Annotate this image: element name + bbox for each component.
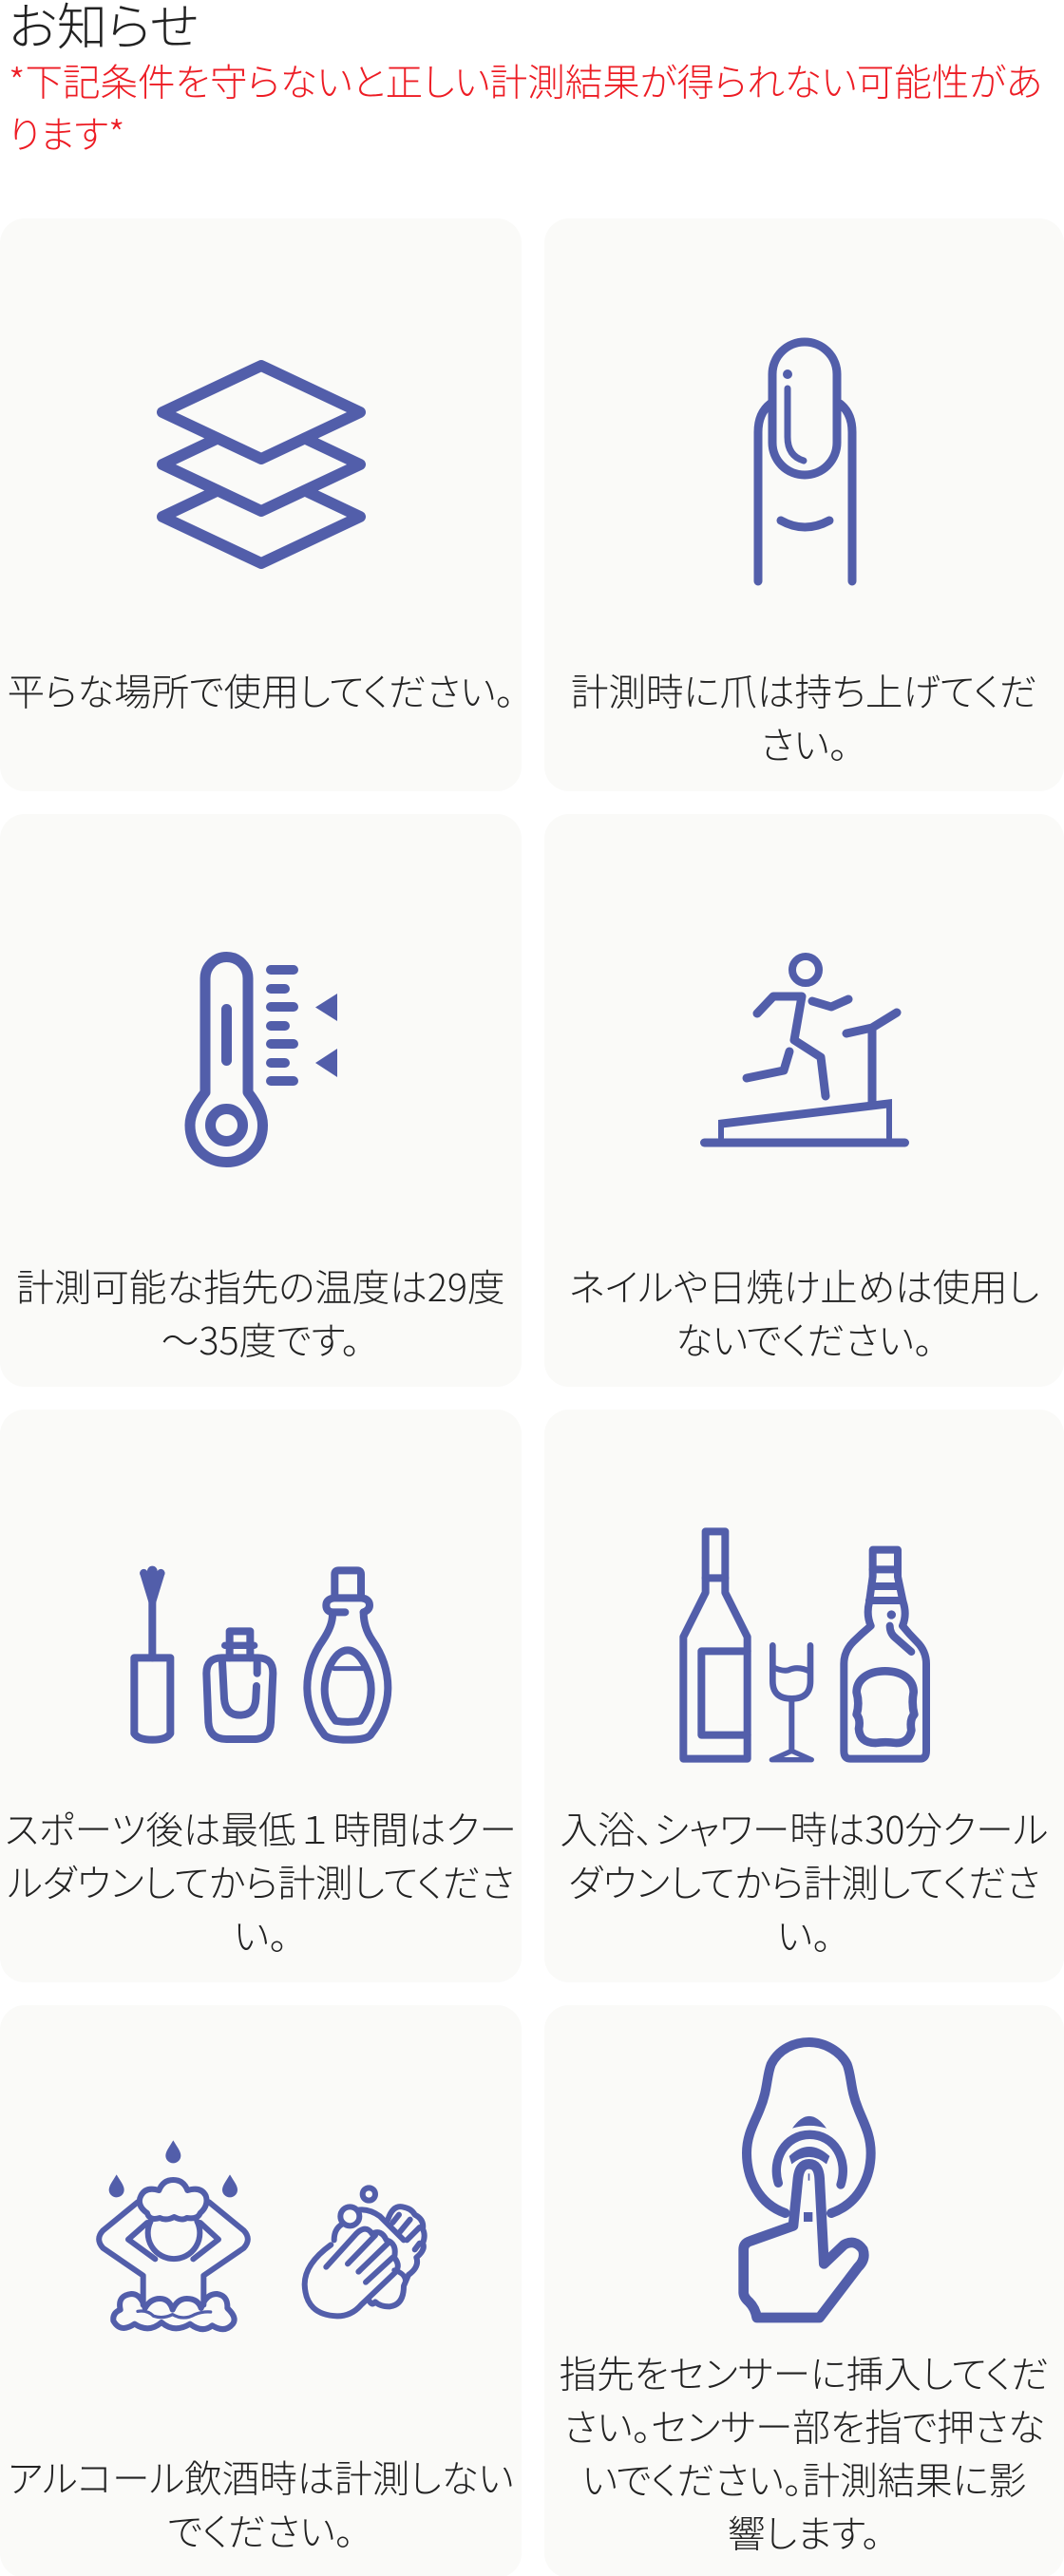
- text: temperature: ～35度です。: [162, 1312, 360, 1366]
- panel: sensor: [544, 2005, 1064, 2576]
- text: nail: 計測時に爪は持ち上げてくだ: [571, 663, 1037, 717]
- text: bath cooldown: ダウンしてから計測してくださ: [568, 1854, 1040, 1908]
- icon: finger on sensor: [738, 2037, 876, 2323]
- text: alcohol: でください。: [168, 2503, 353, 2557]
- panel: flat surface: [0, 218, 522, 791]
- text: exercise cooldown: スポーツ後は最低１時間はクー: [5, 1801, 517, 1855]
- text: treadmill: ないでください。: [675, 1312, 933, 1366]
- text: temperature: 計測可能な指先の温度は29度: [16, 1259, 505, 1313]
- warning text: *下記条件を守らないと正しい計測結果が得られない可能性があ: [9, 53, 1042, 107]
- text: exercise cooldown: [5, 1801, 517, 1961]
- icon: runner on treadmill: [700, 953, 909, 1147]
- icon: showering person and washing hands: [96, 2141, 428, 2333]
- text: sensor: [560, 2345, 1049, 2559]
- panel: temperature: [0, 814, 522, 1387]
- text: sensor: いでください。計測結果に影: [582, 2452, 1026, 2506]
- text: bath cooldown: [560, 1801, 1048, 1961]
- text: bath cooldown: 入浴、シャワー時は30分クール: [560, 1801, 1048, 1855]
- text: nail: [571, 663, 1037, 770]
- text: temperature: [16, 1259, 505, 1366]
- text: treadmill: [569, 1259, 1039, 1366]
- panel: treadmill: [544, 814, 1064, 1387]
- icon: stacked layers: [157, 360, 366, 569]
- panel: bath cooldown: [544, 1410, 1064, 1982]
- icon: fingernail: [754, 338, 857, 585]
- warning text: [9, 53, 1042, 160]
- icon: thermometer: [184, 952, 337, 1167]
- text: exercise cooldown: い。: [234, 1907, 288, 1961]
- panel: exercise cooldown: [0, 1410, 522, 1982]
- text: alcohol: アルコール飲酒時は計測しない: [8, 2450, 514, 2504]
- text: sensor: 指先をセンサーに挿入してくだ: [560, 2345, 1049, 2399]
- icon: bottles and glass: [679, 1527, 930, 1763]
- text: alcohol: [8, 2450, 514, 2557]
- text: exercise cooldown: ルダウンしてから計測してくださ: [8, 1854, 514, 1908]
- panel: alcohol: [0, 2005, 522, 2576]
- text: nail: さい。: [760, 716, 848, 770]
- warning text: ります*: [9, 105, 125, 160]
- text: treadmill: ネイルや日焼け止めは使用し: [569, 1259, 1039, 1313]
- panel: nail: [544, 218, 1064, 791]
- text: sensor: さい。センサー部を指で押さな: [563, 2398, 1045, 2453]
- icon: nail polish and sunscreen: [130, 1565, 391, 1744]
- text: bath cooldown: い。: [777, 1907, 831, 1961]
- text: sensor: 響します。: [728, 2505, 881, 2559]
- text: flat surface: 平らな場所で使用してください。: [8, 663, 514, 717]
